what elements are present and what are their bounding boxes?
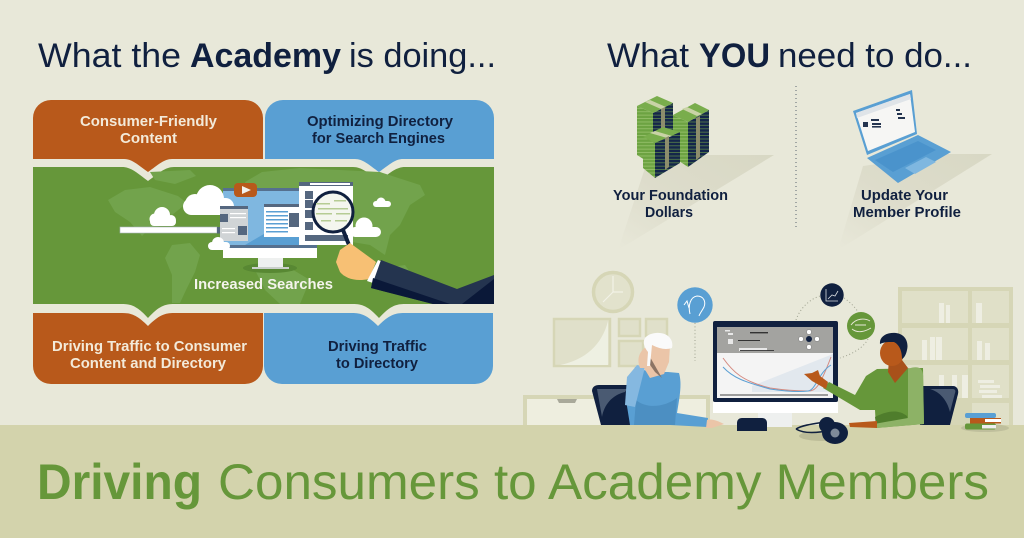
monitor with audiogram xyxy=(713,321,838,427)
panel: driving traffic to directory: Driving Traffic xyxy=(328,338,427,355)
panel: driving traffic to consumer content: Driving Traffic to Consumer xyxy=(52,338,247,355)
icon: money stacks xyxy=(637,96,709,178)
gray window xyxy=(220,206,248,241)
hand and suit sleeve xyxy=(336,243,494,304)
label: your foundation dollars: Your Foundation xyxy=(613,187,728,204)
world map continents xyxy=(108,168,425,304)
right cloud xyxy=(350,218,381,237)
man in green xyxy=(804,333,924,428)
heading: What YOU need to do xyxy=(607,37,972,75)
label: update your member profile: Update Your xyxy=(861,187,948,204)
hearing device on desk xyxy=(737,418,767,431)
panel: increased searches map xyxy=(33,167,494,318)
wall clock xyxy=(594,272,632,312)
heading: What YOU need to do: need to do... xyxy=(778,37,972,75)
big cloud xyxy=(183,185,234,215)
middle window xyxy=(264,204,299,237)
icon: ear circle xyxy=(677,287,713,323)
heading: What YOU need to do: YOU xyxy=(699,37,770,75)
panel: consumer-friendly content: Content xyxy=(120,130,177,147)
heading: What the Academy is doing: What the xyxy=(38,37,181,75)
item: foundation dollars xyxy=(613,96,774,250)
books stack xyxy=(961,413,1009,432)
icon: chart circle xyxy=(820,283,844,307)
picture frames xyxy=(554,319,667,366)
panel: driving traffic to directory: to Directory xyxy=(336,355,419,372)
cabinet xyxy=(523,395,710,425)
panel: driving traffic to consumer content xyxy=(33,313,263,384)
label: your foundation dollars: Dollars xyxy=(645,204,693,221)
label: increased searches: Increased Searches xyxy=(194,276,333,293)
heading: What YOU need to do: What xyxy=(607,37,690,75)
heading: What the Academy is doing: is doing... xyxy=(349,37,496,75)
panel: consumer-friendly content xyxy=(33,100,263,172)
cloud far left xyxy=(150,207,176,226)
lower left cloud xyxy=(208,237,230,250)
far right cloud xyxy=(373,198,391,207)
label: update your member profile: Member Profile xyxy=(853,204,961,221)
chair right xyxy=(920,386,958,425)
item: update member profile xyxy=(838,90,992,250)
tagline: driving consumers to academy members: Consumers to Academy Members xyxy=(218,454,989,510)
label: your foundation dollars xyxy=(613,187,728,221)
magnifying glass xyxy=(313,192,353,245)
heading: What the Academy is doing xyxy=(38,37,496,75)
chair left xyxy=(592,385,632,425)
icon: hands circle xyxy=(847,312,875,340)
panel: optimizing directory xyxy=(265,100,494,172)
heading: What the Academy is doing: Academy xyxy=(190,37,341,75)
search bar xyxy=(120,227,225,234)
tagline: driving consumers to academy members: Driving xyxy=(37,454,202,510)
panel: driving traffic to consumer content: Content and Directory xyxy=(70,355,227,372)
woman in blue xyxy=(625,333,724,428)
label: update your member profile xyxy=(853,187,961,221)
document window xyxy=(299,182,353,245)
dotted connectors xyxy=(695,296,868,361)
play button xyxy=(234,183,257,197)
panel: optimizing directory: Optimizing Directory xyxy=(307,113,454,130)
office background: clock, frames, shelves, cabinet xyxy=(523,272,1013,425)
icon: laptop xyxy=(853,90,951,183)
headphones xyxy=(796,417,848,444)
panel: consumer-friendly content: Consumer-Friendly xyxy=(80,113,218,130)
bookshelf xyxy=(898,287,1013,425)
desktop monitor xyxy=(223,188,317,273)
panel: driving traffic to directory xyxy=(264,313,493,384)
bottom band xyxy=(0,425,1024,538)
panel: optimizing directory: for Search Engines xyxy=(312,130,445,147)
